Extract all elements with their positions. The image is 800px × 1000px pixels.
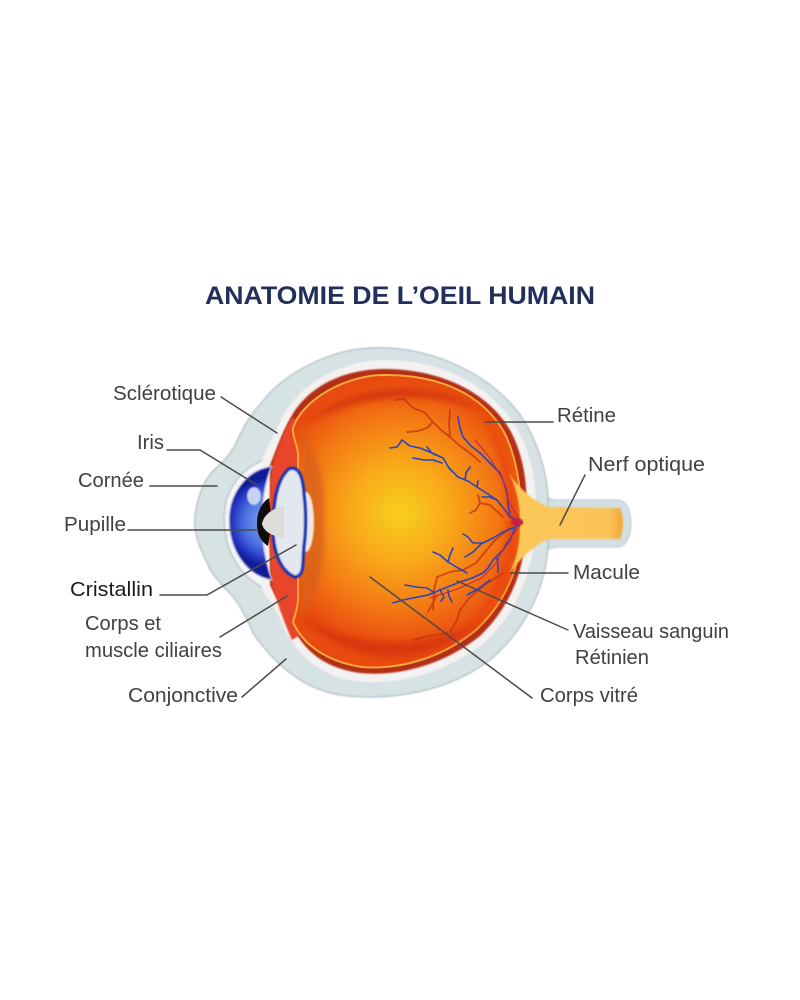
line: conjonctive [242,659,286,697]
optic nerve [508,472,623,576]
label: Nerf optique: Nerf optique [588,453,705,476]
optic nerve sheath [525,470,631,580]
line: sclérotique [221,397,277,433]
labels [64,382,729,707]
label: Iris: Iris [137,431,164,454]
iris highlight [247,487,261,505]
label: Macule: Macule [573,561,640,584]
optic disc [511,518,523,526]
lens outer glow [298,492,314,552]
line: corps vitré [370,577,532,698]
iris [229,466,272,580]
lens [273,468,306,577]
pupil [257,498,272,546]
line: macule [510,572,568,574]
title: ANATOMIE DE L’OEIL HUMAIN [205,282,595,310]
label: Pupille: Pupille [64,513,126,536]
line: cornée [150,485,217,487]
line: pupille [128,529,258,531]
choroid blood vessels [395,399,510,640]
white layer [262,360,536,682]
dark upper and lower edge shading [300,388,485,657]
vitreous body with thin yellow retina rim [293,375,521,667]
label: Sclérotique: Sclérotique [113,382,216,405]
label: Conjonctive: Conjonctive [128,684,238,707]
line: iris [167,450,257,485]
label: Corps vitré: Corps vitré [540,684,638,707]
label: Vaisseau sanguin Rétinien: Vaisseau sanguin [573,620,729,643]
line: corps et muscle ciliaires [220,596,287,637]
labels: Rétinien [575,646,649,669]
cornea inner band [224,458,272,592]
label: Cornée: Cornée [78,469,144,492]
right red edge of retina [472,408,518,628]
sclera outer layer [195,348,548,697]
label: Cristallin: Cristallin [70,578,153,601]
lens front nucleus [262,506,284,538]
eye diagram [195,348,631,697]
ciliary body [268,418,325,640]
choroid dark outer [270,369,527,674]
line: cristallin [160,545,296,595]
label: Rétine: Rétine [557,404,616,427]
line: rétine [485,421,553,423]
line: nerf optique [560,475,585,525]
retinal arteries red [430,440,520,598]
labels: muscle ciliaires [85,639,222,662]
label: Corps et muscle ciliaires: Corps et [85,612,161,635]
vitreous anterior shadow [300,430,324,620]
leader lines [128,397,585,698]
retinal veins blue [390,417,522,603]
line: vaisseau sanguin [457,581,568,630]
